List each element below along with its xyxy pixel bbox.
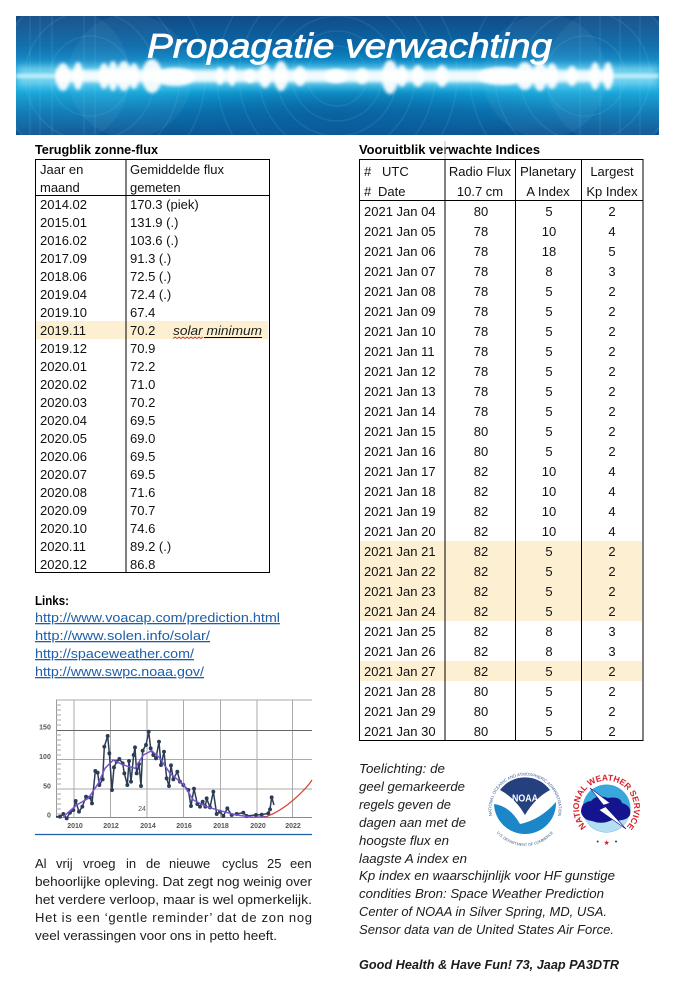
table: vooruitblik verwachte indices: 2021 Jan 16 xyxy=(364,444,436,459)
table: vooruitblik verwachte indices: 8 xyxy=(545,644,553,659)
table: vooruitblik verwachte indices: 2021 Jan 05 xyxy=(364,224,436,239)
heading: terugblik: Terugblik zonne-flux xyxy=(35,142,159,157)
table: vooruitblik verwachte indices: 2 xyxy=(608,304,616,319)
banner title: Propagatie verwachting xyxy=(147,28,552,66)
table: vooruitblik verwachte indices: 10 xyxy=(542,504,556,519)
table: vooruitblik verwachte indices: 2 xyxy=(608,384,616,399)
table: vooruitblik verwachte indices: 2021 Jan 14 xyxy=(364,404,436,419)
table: vooruitblik verwachte indices: 82 xyxy=(474,464,488,479)
table: vooruitblik verwachte indices: 5 xyxy=(545,724,553,739)
table: vooruitblik verwachte indices: 78 xyxy=(474,324,488,339)
paragraph: cyclus 25: de xyxy=(146,856,160,871)
table: vooruitblik verwachte indices: 78 xyxy=(474,304,488,319)
table: vooruitblik verwachte indices: 5 xyxy=(545,344,553,359)
table: vooruitblik verwachte indices: 10 xyxy=(542,224,556,239)
table: vooruitblik verwachte indices: 5 xyxy=(545,364,553,379)
table: vooruitblik verwachte indices: 2021 Jan 17 xyxy=(364,464,436,479)
table: terugblik zonne-flux: 2016.02 xyxy=(40,233,87,248)
table: terugblik zonne-flux: 2019.04 xyxy=(40,287,87,302)
annotation: solar minimum: solar minimum xyxy=(173,323,262,338)
table: vooruitblik verwachte indices: 78 xyxy=(474,264,488,279)
table: vooruitblik verwachte indices: 10.7 cm xyxy=(457,184,503,199)
table: vooruitblik verwachte indices: 2021 Jan 19 xyxy=(364,504,436,519)
table: vooruitblik verwachte indices: 2 xyxy=(608,704,616,719)
table: terugblik zonne-flux: 2020.09 xyxy=(40,503,87,518)
table: vooruitblik verwachte indices: 10 xyxy=(542,524,556,539)
table: vooruitblik verwachte indices: 2021 Jan 26 xyxy=(364,644,436,659)
paragraph: cyclus 25: een xyxy=(290,856,312,871)
table: terugblik zonne-flux: 69.0 xyxy=(130,431,155,446)
table: terugblik zonne-flux: 2020.10 xyxy=(40,521,87,536)
table: vooruitblik verwachte indices: 8 xyxy=(545,264,553,279)
chart axis labels: 24 xyxy=(138,806,146,813)
text block: toelichting: regels geven de xyxy=(359,797,451,812)
table: vooruitblik verwachte indices: 3 xyxy=(608,264,616,279)
table: vooruitblik verwachte indices: 18 xyxy=(542,244,556,259)
table: terugblik zonne-flux: 72.5 (.) xyxy=(130,269,171,284)
table: vooruitblik verwachte indices: 2 xyxy=(608,324,616,339)
icon: NOAA logo: NOAA xyxy=(512,794,538,804)
table: terugblik zonne-flux: 72.2 xyxy=(130,359,155,374)
table: terugblik zonne-flux: 72.4 (.) xyxy=(130,287,171,302)
highlighted row Jan 27 xyxy=(360,661,642,681)
table: terugblik zonne-flux: 69.5 xyxy=(130,413,155,428)
text block: toelichting: Center of NOAA in Silver Spring, MD, USA. xyxy=(359,904,607,919)
table: vooruitblik verwachte indices: 5 xyxy=(545,564,553,579)
table: vooruitblik verwachte indices: 2021 Jan 21 xyxy=(364,544,436,559)
table: vooruitblik verwachte indices: 2021 Jan 06 xyxy=(364,244,436,259)
table: terugblik zonne-flux: Jaar en xyxy=(40,162,83,177)
table: vooruitblik verwachte indices: 5 xyxy=(545,324,553,339)
table: terugblik zonne-flux: 71.0 xyxy=(130,377,155,392)
table: vooruitblik verwachte indices: 5 xyxy=(545,304,553,319)
table: vooruitblik verwachte indices: # xyxy=(364,164,372,179)
text block: toelichting: hoogste flux en xyxy=(359,833,449,848)
text block: toelichting: geel gemarkeerde xyxy=(359,779,465,794)
table: vooruitblik verwachte indices: 80 xyxy=(474,444,488,459)
table: vooruitblik verwachte indices: 78 xyxy=(474,344,488,359)
table: vooruitblik verwachte indices: # xyxy=(364,184,372,199)
table: vooruitblik verwachte indices: 2 xyxy=(608,664,616,679)
table: vooruitblik verwachte indices: 5 xyxy=(545,684,553,699)
paragraph: cyclus 25: in xyxy=(126,856,136,871)
chart: solar cycle 24 sunspot number xyxy=(35,700,312,834)
table: vooruitblik verwachte indices: 4 xyxy=(608,504,616,519)
table: vooruitblik verwachte indices: 2021 Jan 12 xyxy=(364,364,436,379)
table: vooruitblik verwachte indices xyxy=(360,141,643,740)
paragraph: cyclus 25: behoorlijke opleving. Dat zegt nog weinig over xyxy=(35,874,313,889)
paragraph: cyclus 25: 25 xyxy=(267,856,281,871)
table: vooruitblik verwachte indices: Kp Index xyxy=(586,184,638,199)
text block: toelichting xyxy=(359,761,615,937)
highlighted row 2019.11 xyxy=(36,321,268,339)
table: vooruitblik verwachte indices: 5 xyxy=(545,544,553,559)
table: vooruitblik verwachte indices: 78 xyxy=(474,244,488,259)
table: vooruitblik verwachte indices: 2 xyxy=(608,404,616,419)
table: terugblik zonne-flux: 2020.07 xyxy=(40,467,87,482)
table: vooruitblik verwachte indices: 5 xyxy=(545,204,553,219)
chart axis labels: 2016 xyxy=(176,823,192,830)
paragraph: cyclus 25: veel verassingen voor ons in petto heeft. xyxy=(35,928,277,943)
chart axis labels: 2010 xyxy=(67,823,83,830)
table: vooruitblik verwachte indices: 82 xyxy=(474,484,488,499)
table: vooruitblik verwachte indices: 2021 Jan 11 xyxy=(364,344,435,359)
table: vooruitblik verwachte indices: 5 xyxy=(545,444,553,459)
table: vooruitblik verwachte indices: 78 xyxy=(474,284,488,299)
table: vooruitblik verwachte indices: 2 xyxy=(608,424,616,439)
links: Links: xyxy=(35,593,69,608)
chart axis labels: 2020 xyxy=(250,823,266,830)
table: vooruitblik verwachte indices: 5 xyxy=(545,584,553,599)
table: terugblik zonne-flux: 2017.09 xyxy=(40,251,87,266)
table: vooruitblik verwachte indices: 78 xyxy=(474,224,488,239)
paragraph: cyclus 25: Het is een ‘gentle reminder’ dat de zon nog xyxy=(35,910,312,925)
table: vooruitblik verwachte indices: 2 xyxy=(608,724,616,739)
links: http://www.voacap.com/prediction.html xyxy=(35,610,280,625)
table: vooruitblik verwachte indices: 82 xyxy=(474,664,488,679)
table: terugblik zonne-flux: 2020.02 xyxy=(40,377,87,392)
table: terugblik zonne-flux: 74.6 xyxy=(130,521,155,536)
table: vooruitblik verwachte indices: 4 xyxy=(608,484,616,499)
table: terugblik zonne-flux: 2020.06 xyxy=(40,449,87,464)
heading: vooruitblik: Vooruitblik verwachte Indices xyxy=(359,142,540,157)
text block: toelichting: dagen aan met de xyxy=(359,815,466,830)
text block: toelichting: condities Bron: Space Weather Prediction xyxy=(359,886,604,901)
table: vooruitblik verwachte indices: 2021 Jan 13 xyxy=(364,384,436,399)
chart axis labels: 2012 xyxy=(103,823,119,830)
table: vooruitblik verwachte indices: 2021 Jan 22 xyxy=(364,564,436,579)
table: vooruitblik verwachte indices: 80 xyxy=(474,704,488,719)
icon: National Weather Service logo: NATIONAL WEATHER SERVICE xyxy=(573,774,640,830)
table: vooruitblik verwachte indices: 78 xyxy=(474,364,488,379)
table: vooruitblik verwachte indices: 82 xyxy=(474,504,488,519)
table: vooruitblik verwachte indices: 2021 Jan 15 xyxy=(364,424,436,439)
table: vooruitblik verwachte indices: Largest xyxy=(590,164,634,179)
table: terugblik zonne-flux: 67.4 xyxy=(130,305,155,320)
table: vooruitblik verwachte indices: 5 xyxy=(608,244,616,259)
table: vooruitblik verwachte indices: 2021 Jan 04 xyxy=(364,204,436,219)
table: vooruitblik verwachte indices: 2 xyxy=(608,344,616,359)
table: terugblik zonne-flux: 69.5 xyxy=(130,449,155,464)
chart axis labels: 2014 xyxy=(140,823,156,830)
chart series xyxy=(56,732,312,818)
table: terugblik zonne-flux: 70.7 xyxy=(130,503,155,518)
table: terugblik zonne-flux: 69.5 xyxy=(130,467,155,482)
table: vooruitblik verwachte indices: 2021 Jan 20 xyxy=(364,524,436,539)
table: vooruitblik verwachte indices: 2021 Jan 09 xyxy=(364,304,436,319)
table: terugblik zonne-flux: 170.3 (piek) xyxy=(130,197,199,212)
paragraph: cyclus 25: cyclus xyxy=(222,856,259,871)
table: terugblik zonne-flux: 2020.04 xyxy=(40,413,87,428)
table: terugblik zonne-flux: 71.6 xyxy=(130,485,155,500)
table: terugblik zonne-flux: 2020.12 xyxy=(40,557,87,572)
table: vooruitblik verwachte indices: Radio Flux xyxy=(449,164,512,179)
text block: toelichting: Kp index en waarschijnlijk voor HF gunstige xyxy=(359,868,615,883)
text block: toelichting: Sensor data van de United States Air Force. xyxy=(359,922,614,937)
table: terugblik zonne-flux: 2020.01 xyxy=(40,359,87,374)
sign-off: Good Health & Have Fun! 73, Jaap PA3DTR xyxy=(359,957,620,972)
table: vooruitblik verwachte indices: 4 xyxy=(608,524,616,539)
links: http://spaceweather.com/ xyxy=(35,646,194,661)
table: vooruitblik verwachte indices: 82 xyxy=(474,564,488,579)
paragraph: cyclus 25: het verdere verloop, maar is wel opmerkelijk. xyxy=(35,892,312,907)
table: terugblik zonne-flux: 2019.10 xyxy=(40,305,87,320)
paragraph: cyclus 25: Al xyxy=(35,856,47,871)
paragraph: cyclus 25 xyxy=(35,856,313,943)
table: terugblik zonne-flux: 2020.11 xyxy=(40,539,86,554)
table: vooruitblik verwachte indices: 5 xyxy=(545,424,553,439)
highlighted rows Jan 21-24 xyxy=(360,541,642,621)
chart axis labels: 50 xyxy=(43,784,51,790)
icon: NOAA logo xyxy=(488,772,562,846)
table: terugblik zonne-flux: 2018.06 xyxy=(40,269,87,284)
table: terugblik zonne-flux: 2019.12 xyxy=(40,341,87,356)
paragraph: cyclus 25: vrij xyxy=(56,856,73,871)
table: vooruitblik verwachte indices: 78 xyxy=(474,384,488,399)
table: terugblik zonne-flux: maand xyxy=(40,180,80,195)
table: vooruitblik verwachte indices: 2021 Jan 27 xyxy=(364,664,436,679)
table: vooruitblik verwachte indices: 4 xyxy=(608,224,616,239)
table: vooruitblik verwachte indices: 82 xyxy=(474,524,488,539)
table: terugblik zonne-flux: gemeten xyxy=(130,180,181,195)
table: vooruitblik verwachte indices: 5 xyxy=(545,384,553,399)
table: terugblik zonne-flux: 2020.03 xyxy=(40,395,87,410)
table: vooruitblik verwachte indices: 82 xyxy=(474,624,488,639)
table: vooruitblik verwachte indices: 5 xyxy=(545,404,553,419)
table: vooruitblik verwachte indices: 80 xyxy=(474,724,488,739)
table: terugblik zonne-flux: 131.9 (.) xyxy=(130,215,178,230)
text block: toelichting: laagste A index en xyxy=(359,851,467,866)
table: vooruitblik verwachte indices: 2 xyxy=(608,364,616,379)
table: vooruitblik verwachte indices: 80 xyxy=(474,424,488,439)
table: terugblik zonne-flux: 2019.11 xyxy=(40,323,86,338)
paragraph: cyclus 25: vroeg xyxy=(83,856,116,871)
table: terugblik zonne-flux: 70.2 xyxy=(130,323,155,338)
table: terugblik zonne-flux: 2020.05 xyxy=(40,431,87,446)
table: vooruitblik verwachte indices: 2 xyxy=(608,564,616,579)
chart axis labels: 150 xyxy=(39,724,51,732)
table: vooruitblik verwachte indices: 2021 Jan 08 xyxy=(364,284,436,299)
table: vooruitblik verwachte indices: 5 xyxy=(545,704,553,719)
table: vooruitblik verwachte indices: UTC xyxy=(382,164,409,179)
icon: NOAA logo: U.S. DEPARTMENT OF COMMERCE xyxy=(497,831,554,846)
table: vooruitblik verwachte indices: Planetary xyxy=(520,164,577,179)
table: vooruitblik verwachte indices: 3 xyxy=(608,644,616,659)
table: vooruitblik verwachte indices: 82 xyxy=(474,644,488,659)
table: vooruitblik verwachte indices: 2021 Jan 10 xyxy=(364,324,436,339)
chart axis labels xyxy=(39,724,301,830)
table: vooruitblik verwachte indices: 2021 Jan 29 xyxy=(364,704,436,719)
table: vooruitblik verwachte indices: 2021 Jan 18 xyxy=(364,484,436,499)
table: vooruitblik verwachte indices: 3 xyxy=(608,624,616,639)
table: terugblik zonne-flux: 70.9 xyxy=(130,341,155,356)
table: vooruitblik verwachte indices: 5 xyxy=(545,284,553,299)
table: vooruitblik verwachte indices: 5 xyxy=(545,664,553,679)
table: vooruitblik verwachte indices: 2 xyxy=(608,684,616,699)
table: terugblik zonne-flux xyxy=(36,160,270,572)
table: vooruitblik verwachte indices: 10 xyxy=(542,484,556,499)
table: terugblik zonne-flux: 2020.08 xyxy=(40,485,87,500)
table: vooruitblik verwachte indices: 2021 Jan 28 xyxy=(364,684,436,699)
table: vooruitblik verwachte indices: 80 xyxy=(474,204,488,219)
table: vooruitblik verwachte indices: 82 xyxy=(474,604,488,619)
table: terugblik zonne-flux: 2014.02 xyxy=(40,197,87,212)
table: vooruitblik verwachte indices: 10 xyxy=(542,464,556,479)
text block: toelichting: Toelichting: de xyxy=(359,761,445,776)
table: vooruitblik verwachte indices: 82 xyxy=(474,584,488,599)
links: http://www.swpc.noaa.gov/ xyxy=(35,664,204,679)
table: vooruitblik verwachte indices: 2 xyxy=(608,284,616,299)
table: vooruitblik verwachte indices: 2 xyxy=(608,544,616,559)
chart axis labels: 0 xyxy=(47,812,51,820)
table: vooruitblik verwachte indices: 82 xyxy=(474,544,488,559)
banner xyxy=(16,16,659,135)
links xyxy=(35,593,280,679)
table: vooruitblik verwachte indices: 8 xyxy=(545,624,553,639)
table: terugblik zonne-flux: Gemiddelde flux xyxy=(130,162,224,177)
table: vooruitblik verwachte indices: 2 xyxy=(608,584,616,599)
chart axis labels: 100 xyxy=(39,754,51,761)
table: vooruitblik verwachte indices: 78 xyxy=(474,404,488,419)
table: terugblik zonne-flux: 89.2 (.) xyxy=(130,539,171,554)
links: http://www.solen.info/solar/ xyxy=(35,628,210,643)
icon: National Weather Service logo: ★ xyxy=(604,839,610,847)
table: vooruitblik verwachte indices: 2 xyxy=(608,204,616,219)
table: terugblik zonne-flux: 91.3 (.) xyxy=(130,251,171,266)
icon: NOAA logo: NATIONAL OCEANIC AND ATMOSPHERIC ADMINISTRATION xyxy=(488,772,562,816)
table: vooruitblik verwachte indices: 2021 Jan 25 xyxy=(364,624,436,639)
chart axis labels: 2018 xyxy=(213,823,229,830)
table: vooruitblik verwachte indices: 2021 Jan 07 xyxy=(364,264,436,279)
table: vooruitblik verwachte indices: 2021 Jan 30 xyxy=(364,724,436,739)
table: terugblik zonne-flux: 103.6 (.) xyxy=(130,233,178,248)
chart axis labels: 2022 xyxy=(285,823,301,830)
table: vooruitblik verwachte indices: A Index xyxy=(526,184,570,199)
table: vooruitblik verwachte indices: 2021 Jan 24 xyxy=(364,604,436,619)
table: vooruitblik verwachte indices: 2021 Jan 23 xyxy=(364,584,436,599)
table: vooruitblik verwachte indices: 5 xyxy=(545,604,553,619)
table: vooruitblik verwachte indices: Date xyxy=(378,184,405,199)
table: vooruitblik verwachte indices: 2 xyxy=(608,444,616,459)
table: vooruitblik verwachte indices: 2 xyxy=(608,604,616,619)
table: terugblik zonne-flux: 2015.01 xyxy=(40,215,87,230)
paragraph: cyclus 25: nieuwe xyxy=(169,856,210,871)
table: terugblik zonne-flux: 70.2 xyxy=(130,395,155,410)
table: vooruitblik verwachte indices: 4 xyxy=(608,464,616,479)
table: vooruitblik verwachte indices: 80 xyxy=(474,684,488,699)
table: terugblik zonne-flux: 86.8 xyxy=(130,557,155,572)
